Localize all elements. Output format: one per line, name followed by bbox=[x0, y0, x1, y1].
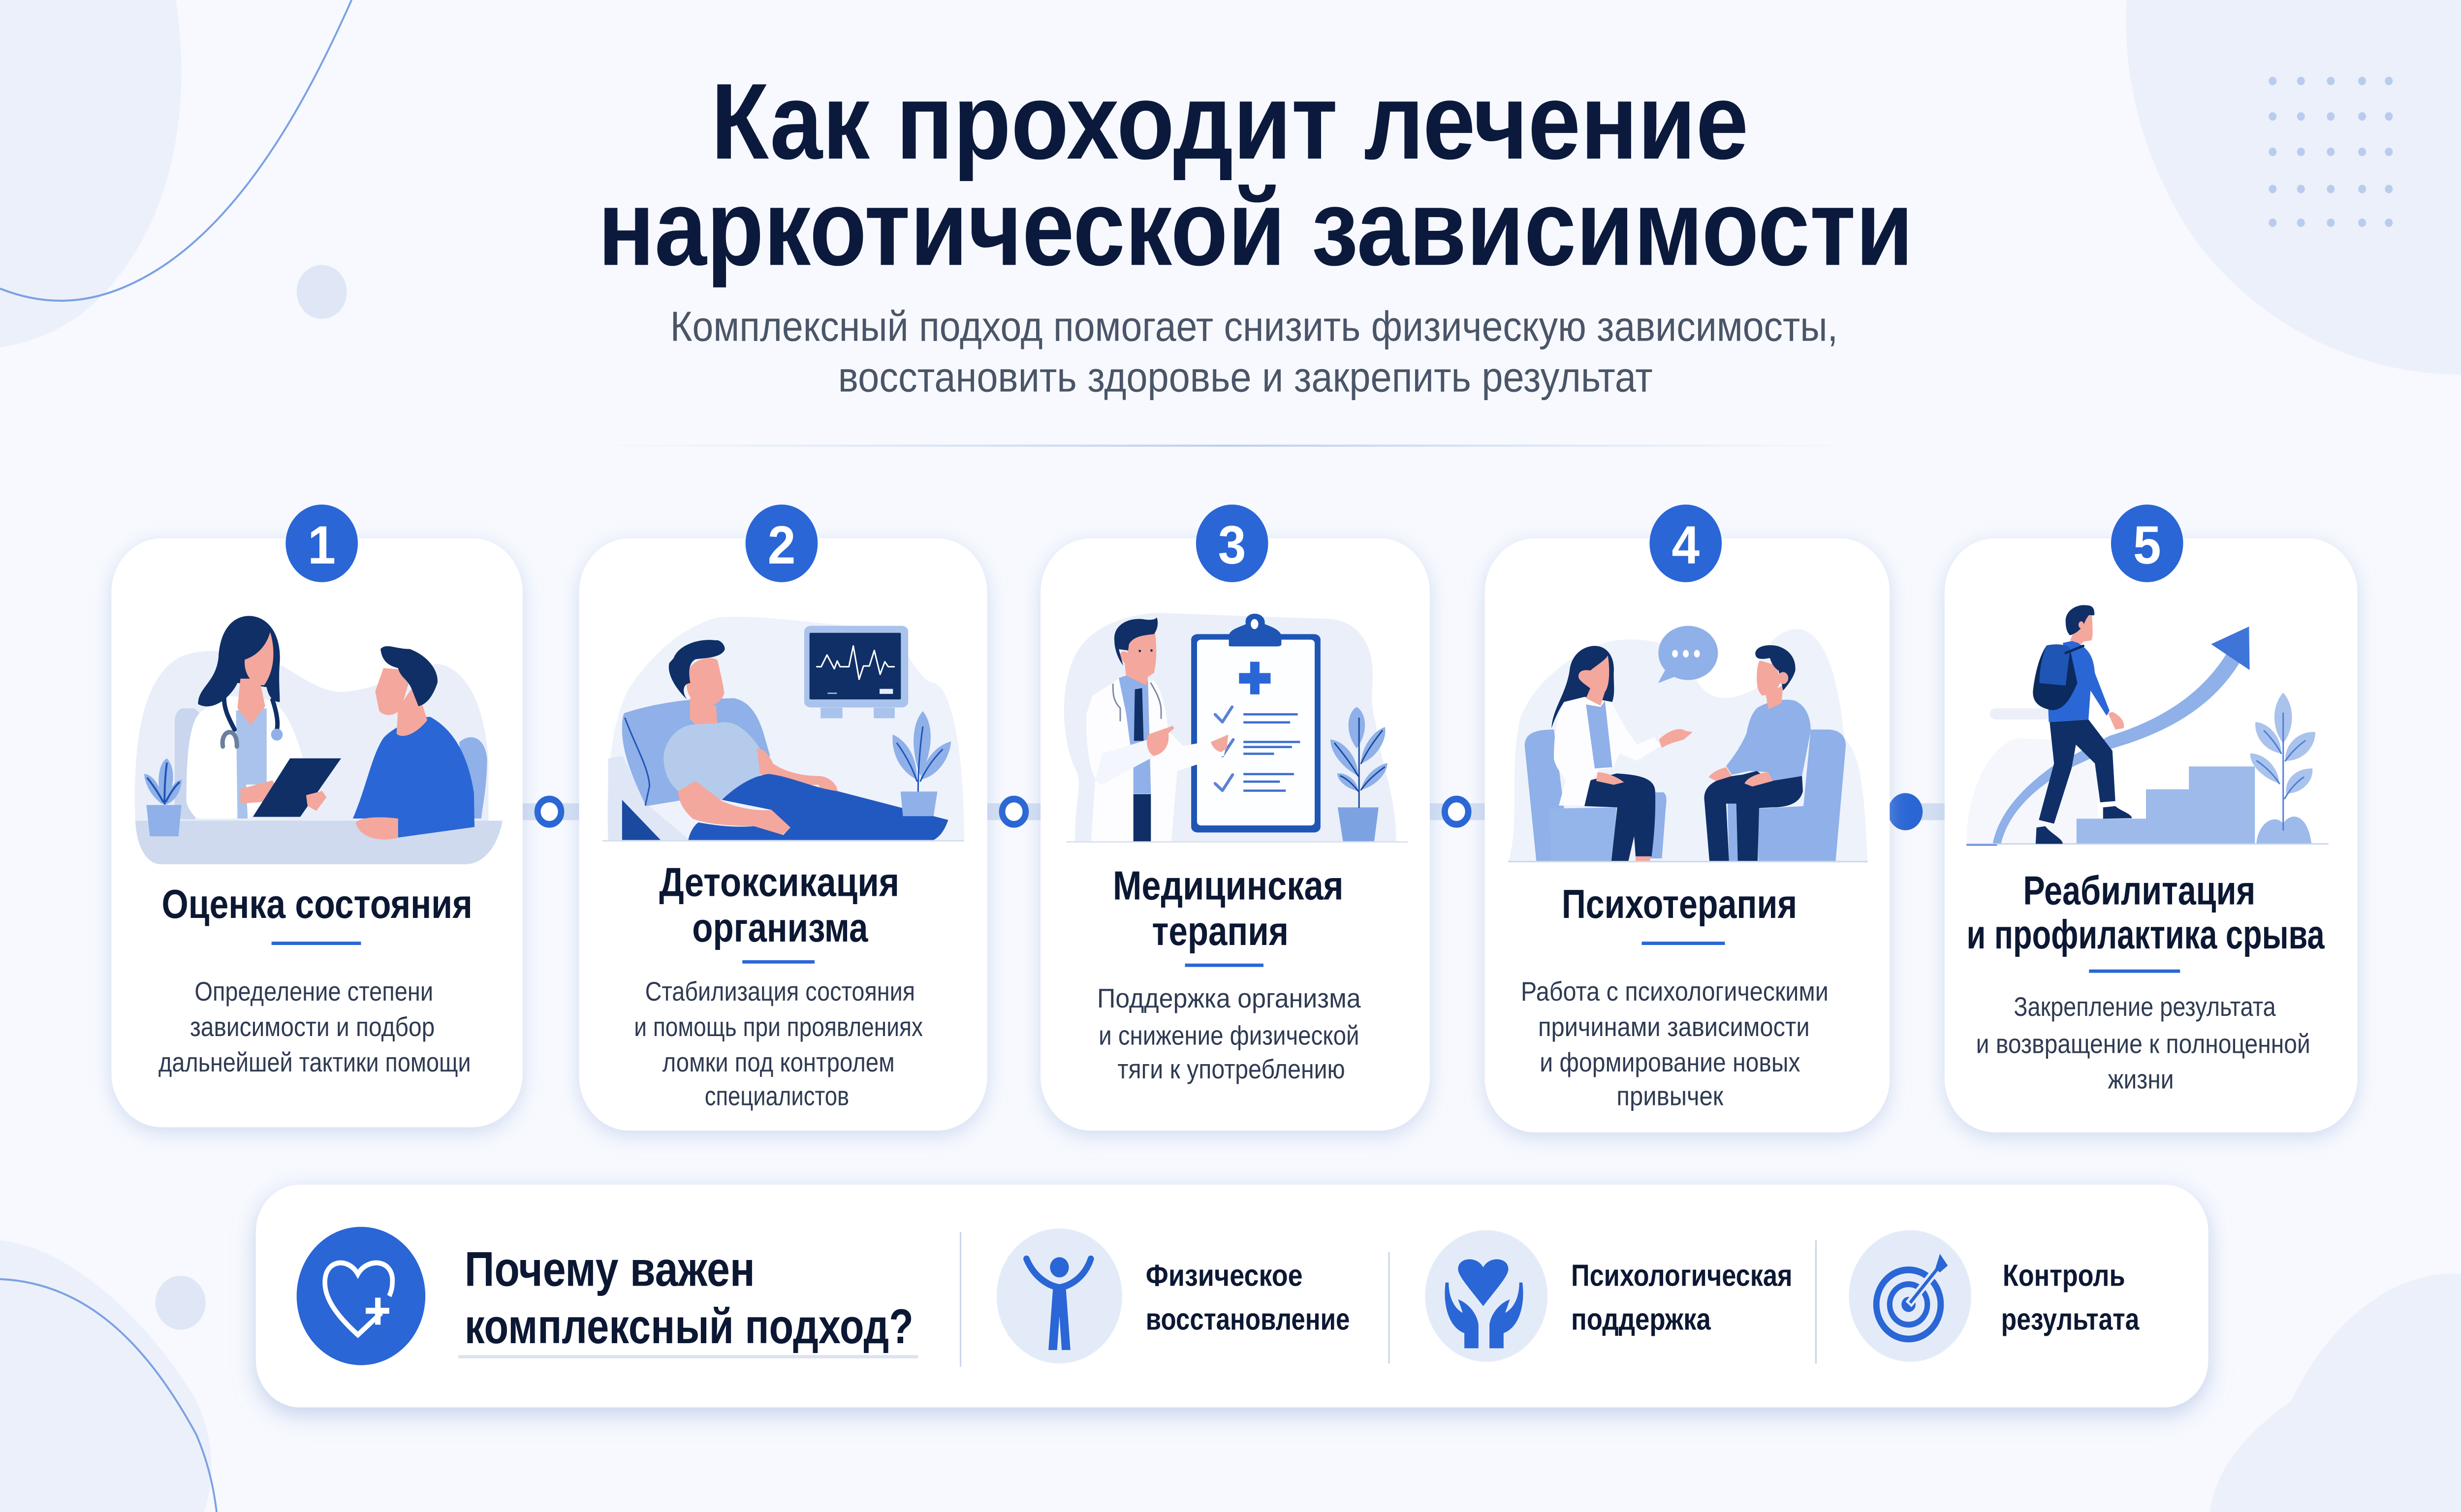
step 1 heading: Оценка состояния bbox=[161, 882, 473, 927]
step 4 text: и формирование новых bbox=[1540, 1047, 1800, 1078]
heading: why: Почему важен bbox=[465, 1242, 755, 1296]
step 5 text: и возвращение к полноценной bbox=[1976, 1029, 2310, 1059]
step 2 text: Стабилизация состояния bbox=[645, 976, 915, 1007]
step 3 heading: Медицинская bbox=[1113, 863, 1344, 908]
step 5 text: жизни bbox=[2108, 1065, 2174, 1095]
badge 2: 2 bbox=[768, 515, 795, 575]
step 1 text bbox=[158, 976, 471, 1078]
illustration: doctor with clipboard bbox=[1064, 613, 1408, 843]
step 4 text bbox=[1521, 976, 1829, 1111]
step 5 text: Закрепление результата bbox=[2014, 992, 2276, 1022]
heading: why: комплексный подход? bbox=[465, 1299, 914, 1354]
step 4 text: причинами зависимости bbox=[1538, 1012, 1810, 1042]
title bbox=[598, 61, 1913, 288]
badge 5: 5 bbox=[2133, 515, 2161, 575]
connector 1 bbox=[523, 799, 579, 824]
heading: why bbox=[465, 1242, 914, 1354]
step 2 text bbox=[634, 976, 923, 1111]
connector 4 bbox=[1888, 793, 1945, 830]
step 5 heading bbox=[1967, 868, 2325, 957]
step 2 heading: организма bbox=[692, 905, 868, 950]
badge 5 bbox=[2111, 504, 2183, 582]
text: control of result: Контроль bbox=[2003, 1259, 2125, 1292]
panel: step 3 bbox=[1041, 504, 1430, 1131]
title: Как проходит лечение bbox=[711, 61, 1748, 182]
text: psychological support bbox=[1571, 1259, 1793, 1336]
text: psychological support: Психологическая bbox=[1571, 1259, 1793, 1292]
text: physical recovery: Физическое bbox=[1146, 1259, 1303, 1292]
panel: why complex approach bbox=[256, 1185, 2209, 1407]
step 1 text: зависимости и подбор bbox=[190, 1012, 435, 1042]
subtitle: Комплексный подход помогает снизить физическую зависимосты, bbox=[670, 303, 1838, 350]
step 3 text: тяги к употреблению bbox=[1117, 1054, 1345, 1084]
step 1 text: дальнейшей тактики помощи bbox=[158, 1047, 471, 1078]
illustration: patient in bed with monitor bbox=[602, 617, 964, 842]
badge 4 bbox=[1649, 504, 1722, 582]
step 3 heading bbox=[1113, 863, 1344, 954]
step 1 text: Определение степени bbox=[194, 976, 433, 1007]
panel: step 5 bbox=[1945, 504, 2358, 1133]
step 4 heading: Психотерапия bbox=[1562, 882, 1797, 927]
icon: physical recovery bbox=[997, 1228, 1122, 1363]
badge 1: 1 bbox=[308, 515, 336, 575]
connector 2 bbox=[987, 799, 1041, 824]
subtitle: восстановить здоровье и закрепить результат bbox=[838, 353, 1653, 401]
illustration: man climbing steps with arrow bbox=[1966, 605, 2329, 846]
icon: psychological support bbox=[1425, 1230, 1547, 1362]
connector 3 bbox=[1430, 799, 1485, 824]
step 2 text: и помощь при проявлениях bbox=[634, 1012, 923, 1042]
text: control of result: результата bbox=[2001, 1302, 2140, 1336]
panel: step 1 bbox=[111, 504, 523, 1127]
badge 3 bbox=[1196, 504, 1268, 582]
subtitle bbox=[670, 303, 1838, 401]
step 3 heading: терапия bbox=[1152, 908, 1289, 954]
step 4 text: привычек bbox=[1616, 1081, 1724, 1111]
panel: step 4 bbox=[1485, 504, 1890, 1133]
step 2 text: специалистов bbox=[705, 1081, 849, 1111]
text: physical recovery: восстановление bbox=[1146, 1302, 1350, 1336]
illustration: psychotherapy session bbox=[1508, 626, 1868, 862]
step 5 heading: и профилактика срыва bbox=[1967, 912, 2325, 957]
step 5 text bbox=[1976, 992, 2310, 1095]
badge 2 bbox=[746, 504, 818, 582]
illustration: doctor and patient bbox=[135, 616, 503, 864]
step 3 text bbox=[1097, 983, 1361, 1084]
step 5 heading: Реабилитация bbox=[2023, 868, 2255, 913]
badge 4: 4 bbox=[1672, 515, 1700, 575]
step 2 heading: Детоксикация bbox=[659, 859, 899, 905]
step 3 text: Поддержка организма bbox=[1097, 983, 1361, 1013]
title: наркотической зависимости bbox=[598, 167, 1913, 288]
icon: target bbox=[1849, 1230, 1971, 1362]
step 2 heading bbox=[659, 859, 899, 950]
step 4 text: Работа с психологическими bbox=[1521, 976, 1829, 1007]
text: physical recovery bbox=[1146, 1259, 1350, 1336]
text: psychological support: поддержка bbox=[1571, 1302, 1711, 1336]
step 3 text: и снижение физической bbox=[1099, 1021, 1359, 1051]
badge 1 bbox=[285, 504, 358, 582]
panel: step 2 bbox=[579, 504, 987, 1131]
badge 3: 3 bbox=[1218, 515, 1246, 575]
step 2 text: ломки под контролем bbox=[663, 1047, 895, 1078]
text: control of result bbox=[2001, 1259, 2140, 1336]
icon: heart with plus bbox=[297, 1227, 425, 1365]
